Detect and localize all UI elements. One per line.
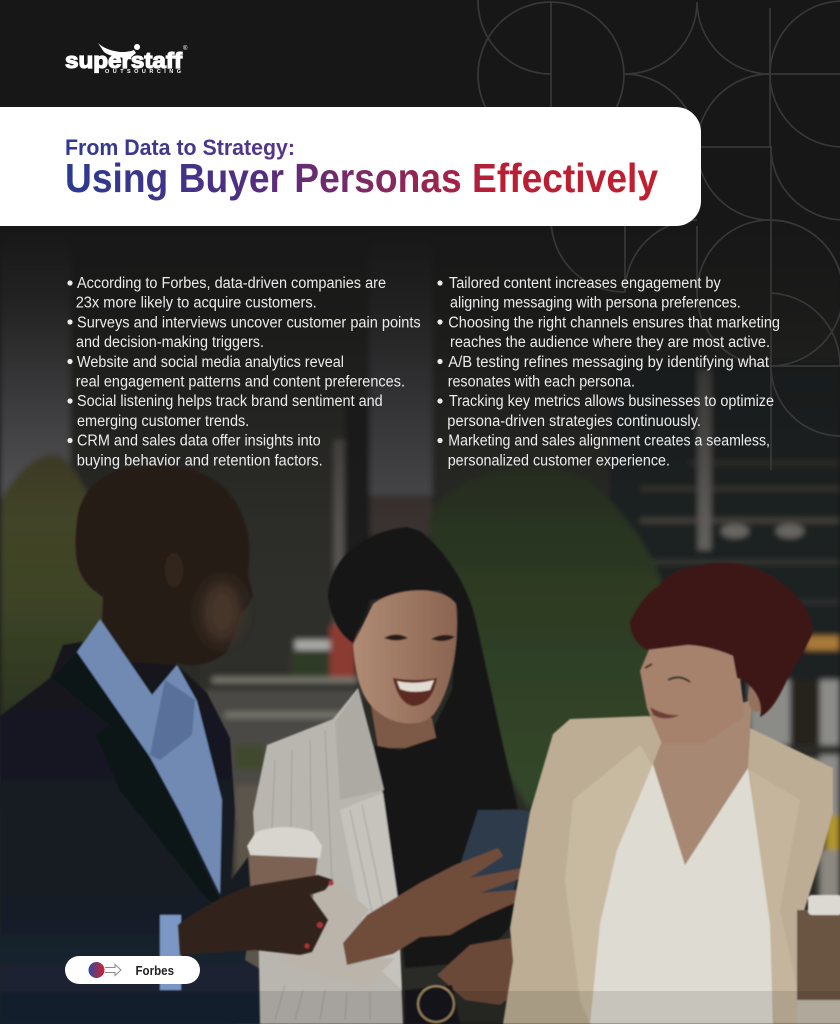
background geometric line pattern bbox=[478, 0, 840, 470]
phone bbox=[460, 810, 532, 906]
left column bullet list: Website and social media analytics reveal bbox=[77, 354, 344, 371]
left column bullet list: 23x more likely to acquire customers. bbox=[76, 295, 317, 312]
head and neck bbox=[76, 466, 253, 695]
right column bullet list: resonates with each persona. bbox=[448, 374, 635, 390]
right column bullet list: aligning messaging with persona preferences. bbox=[450, 295, 741, 312]
logo tagline: OUTSOURCING bbox=[105, 69, 181, 75]
left woman's coffee cup and hand bbox=[178, 827, 334, 955]
slight dark band along the bottom bbox=[0, 991, 840, 1024]
right column bullet list bbox=[437, 275, 780, 469]
shirt cuff bbox=[160, 915, 181, 990]
ear bbox=[748, 682, 766, 712]
left column bullet list: buying behavior and retention factors. bbox=[77, 452, 323, 469]
hand with red nails bbox=[178, 875, 333, 955]
left column bullet list: emerging customer trends. bbox=[77, 413, 249, 430]
eyes bbox=[384, 634, 408, 640]
logo: SuperStaff Outsourcing bbox=[65, 43, 188, 75]
logo wordmark: superstaff bbox=[65, 48, 183, 73]
black top bbox=[373, 738, 520, 968]
right column bullet list: Tailored content increases engagement by bbox=[449, 275, 721, 292]
logo swoosh figure bbox=[98, 43, 140, 58]
source name: Forbes bbox=[136, 964, 174, 978]
right column bullet list: persona-driven strategies continuously. bbox=[447, 413, 701, 430]
lower hand and watch bbox=[437, 938, 532, 1005]
cup lid bbox=[247, 827, 322, 858]
main title: Using Buyer Personas Effectively bbox=[65, 155, 658, 201]
right column bullet list: A/B testing refines messaging by identifying what bbox=[448, 354, 770, 371]
left column bullet list: Social listening helps track brand sentiment and bbox=[77, 393, 383, 410]
dark top gradient overlay bbox=[0, 0, 840, 600]
left column bullet list bbox=[67, 275, 421, 469]
face bbox=[640, 640, 745, 744]
left column bullet list: CRM and sales data offer insights into bbox=[77, 433, 321, 450]
left column bullet list: and decision-making triggers. bbox=[76, 334, 264, 351]
icon: gradient dot bbox=[88, 962, 104, 978]
person: left woman in navy blazer bbox=[0, 466, 267, 1024]
eyes and mouth bbox=[645, 664, 690, 682]
title card bbox=[0, 107, 701, 226]
right column bullet list: Choosing the right channels ensures that marketing bbox=[448, 314, 780, 331]
ear bbox=[165, 553, 183, 587]
neck bbox=[370, 700, 436, 748]
cup sleeve bbox=[249, 855, 318, 905]
registered mark: ® bbox=[183, 45, 188, 52]
lit cheek bbox=[202, 582, 242, 642]
left column bullet list: According to Forbes, data-driven companies are bbox=[77, 275, 386, 292]
black hair and scarf drape bbox=[328, 527, 518, 810]
right column bullet list: personalized customer experience. bbox=[448, 452, 670, 469]
source pill: Forbes bbox=[65, 956, 200, 984]
striped blazer bbox=[253, 688, 403, 1024]
right column bullet list: reaches the audience where they are most active. bbox=[450, 334, 770, 351]
belt ring bbox=[405, 985, 460, 1024]
icon: arrow bbox=[105, 964, 121, 976]
navy blazer bbox=[0, 641, 267, 1024]
blazer lapel shading bbox=[52, 652, 222, 905]
smile bbox=[393, 678, 437, 706]
left column bullet list: Surveys and interviews uncover customer pain points bbox=[77, 314, 421, 331]
background photo: street scene bbox=[0, 230, 840, 1024]
white blouse bbox=[590, 764, 773, 1024]
rolled sleeve bbox=[280, 880, 395, 987]
person: centre woman in striped blazer bbox=[253, 527, 534, 1024]
face bbox=[353, 590, 457, 724]
short auburn hair bbox=[630, 563, 813, 717]
tan blazer bbox=[503, 716, 833, 1024]
right column bullet list: Marketing and sales alignment creates a seamless, bbox=[448, 433, 770, 450]
right column bullet list: Tracking key metrics allows businesses to optimize bbox=[449, 393, 774, 410]
blue shirt bbox=[77, 619, 222, 894]
subtitle: From Data to Strategy: bbox=[65, 135, 295, 160]
person: right woman in tan blazer bbox=[503, 563, 840, 1024]
chest and neck bbox=[653, 700, 752, 865]
forearm and hand holding phone bbox=[343, 848, 528, 965]
left column bullet list: real engagement patterns and content preferences. bbox=[76, 374, 405, 390]
coffee cup in hand bbox=[797, 910, 840, 1010]
